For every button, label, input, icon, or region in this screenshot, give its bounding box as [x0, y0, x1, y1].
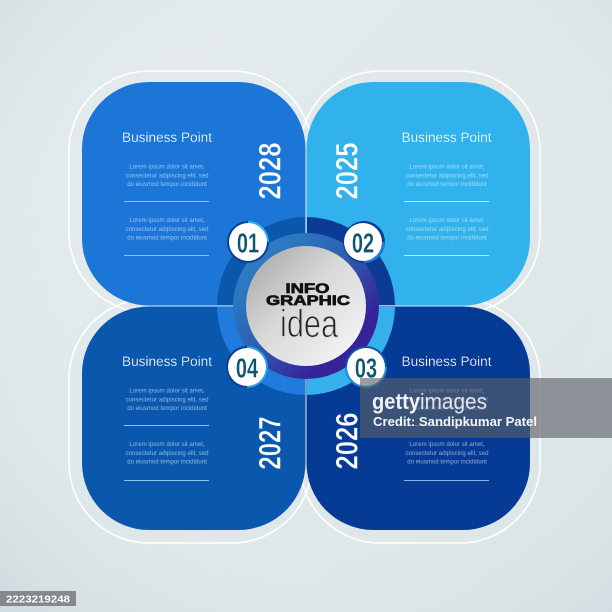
- year 2025: 2025: [330, 142, 365, 200]
- badge 01: 01: [237, 228, 259, 259]
- text block 2b: do eiusmod tempor incididunt: [407, 234, 487, 242]
- outline: petal frames: [69, 71, 540, 543]
- image id tag: [0, 591, 76, 606]
- watermark logo: getty: [372, 389, 421, 414]
- year 2027: 2027: [253, 416, 288, 470]
- text block 4b: Lorem ipsum dolor sit amet,: [129, 441, 205, 448]
- year 2026: 2026: [330, 412, 365, 470]
- text block 1a: do eiusmod tempor incididunt: [127, 181, 207, 188]
- badge 04: 04: [236, 353, 258, 384]
- chart: central hub: [217, 217, 395, 395]
- text block 4b: consectetur adipiscing elit, sed: [126, 450, 208, 457]
- text block 1b: consectetur adipiscing elit, sed: [126, 226, 208, 233]
- text block 2a: Lorem ipsum dolor sit amet,: [409, 164, 485, 170]
- year 2028: 2028: [253, 142, 288, 200]
- middle gradient ring: [233, 233, 379, 379]
- panel: top right 2025: [306, 82, 530, 306]
- text block 3a: Lorem ipsum dolor sit amet,: [409, 388, 485, 394]
- text block 2b: Lorem ipsum dolor sit amet,: [409, 217, 485, 224]
- text block 3a: consectetur adipiscing elit, sed: [406, 396, 488, 404]
- grey disc: [246, 246, 366, 366]
- text block 1a: consectetur adipiscing elit, sed: [126, 172, 208, 180]
- badge 02: 02: [352, 228, 374, 259]
- logo: info graphic idea: [266, 280, 350, 346]
- text block 2b: consectetur adipiscing elit, sed: [406, 226, 488, 233]
- text block 4a: consectetur adipiscing elit, sed: [126, 396, 208, 404]
- heading: business point 2: Business Point: [402, 130, 492, 145]
- panel: bottom right 2026: [306, 306, 530, 530]
- text block 4a: do eiusmod tempor incididunt: [127, 405, 207, 412]
- badge 03: 03: [355, 353, 377, 384]
- text block 2a: do eiusmod tempor incididunt: [407, 181, 487, 188]
- text block 4b: do eiusmod tempor incididunt: [127, 458, 207, 466]
- heading: business point 3: Business Point: [402, 354, 492, 369]
- text block 1a: Lorem ipsum dolor sit amet,: [129, 164, 205, 170]
- text block 4a: Lorem ipsum dolor sit amet,: [129, 388, 205, 394]
- text block 2a: consectetur adipiscing elit, sed: [406, 172, 488, 180]
- panel: top left 2028: [82, 82, 306, 306]
- panel: bottom left 2027: [82, 306, 306, 530]
- image id tag: 2223219248: [6, 594, 70, 606]
- heading: business point 1: Business Point: [122, 130, 212, 145]
- watermark credit: Credit: Sandipkumar Patel: [373, 415, 537, 429]
- text block 3a: do eiusmod tempor incididunt: [407, 405, 487, 412]
- badge 04: [226, 346, 268, 388]
- logo: info graphic idea: INFO: [286, 280, 330, 296]
- watermark band: [360, 378, 612, 438]
- text block 3b: do eiusmod tempor incididunt: [407, 458, 487, 466]
- badge 02: [343, 221, 385, 263]
- outer ring segments: [217, 217, 395, 395]
- text block 1b: Lorem ipsum dolor sit amet,: [129, 217, 205, 224]
- text block 1b: do eiusmod tempor incididunt: [127, 234, 207, 242]
- badge 03: [345, 346, 387, 388]
- logo: info graphic idea: GRAPHIC: [266, 292, 350, 308]
- badge 01: [227, 221, 269, 263]
- text block 3b: Lorem ipsum dolor sit amet,: [409, 441, 485, 448]
- text block 3b: consectetur adipiscing elit, sed: [406, 450, 488, 457]
- heading: business point 4: Business Point: [122, 354, 212, 369]
- watermark band: images: [420, 389, 487, 414]
- logo: info graphic idea: idea: [280, 303, 338, 346]
